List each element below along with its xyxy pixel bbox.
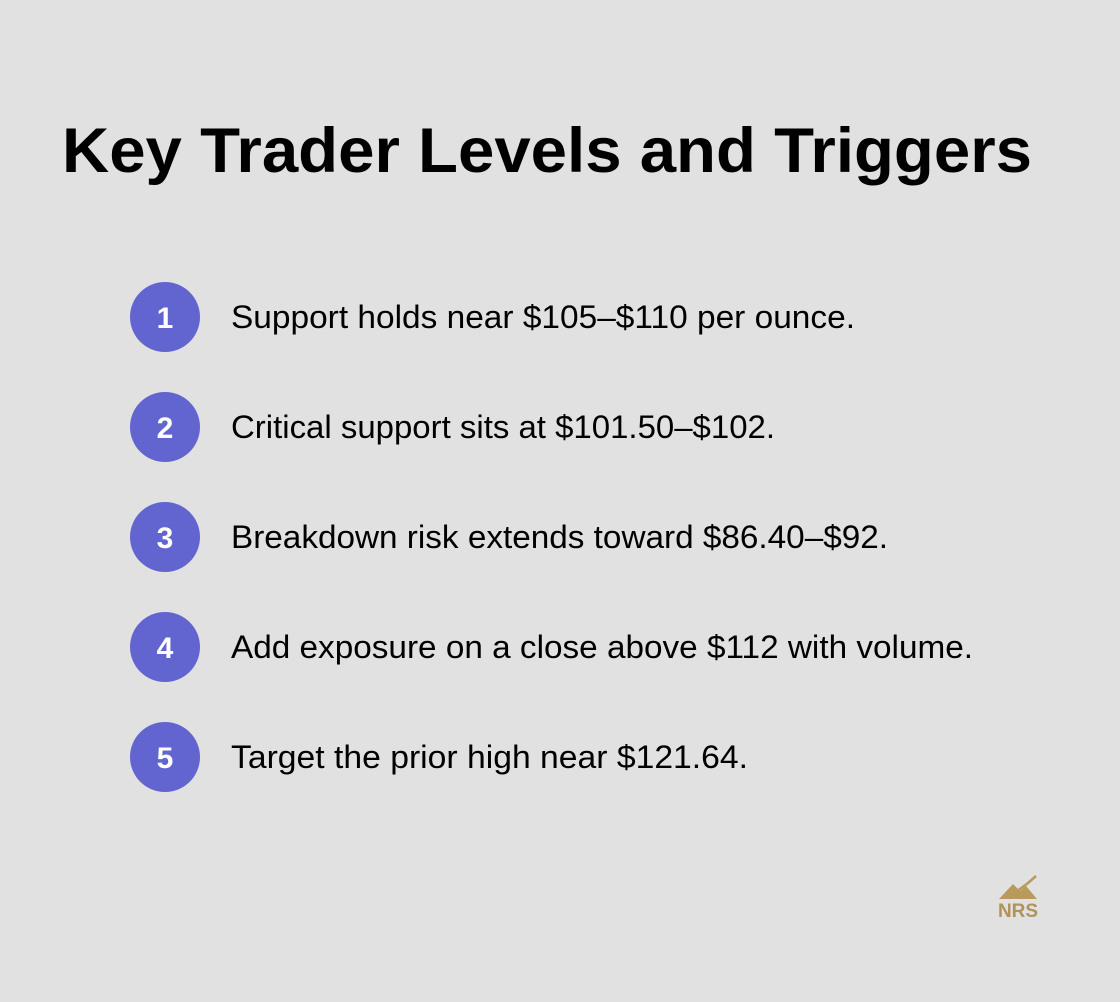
icon: number 5	[130, 722, 200, 792]
icon: number 4	[130, 612, 200, 682]
logo: NRS	[998, 876, 1038, 922]
item 3	[130, 502, 888, 572]
icon: number 5: 5	[157, 742, 173, 775]
item 4	[130, 612, 973, 682]
text 1: Support holds near $105–$110 per ounce.	[231, 299, 855, 335]
title: Key Trader Levels and Triggers	[62, 116, 1032, 186]
icon: number 4: 4	[157, 632, 174, 665]
text 2: Critical support sits at $101.50–$102.	[231, 409, 775, 445]
text 3: Breakdown risk extends toward $86.40–$92.	[231, 519, 888, 555]
icon: number 3	[130, 502, 200, 572]
logo: NRS: NRS	[998, 901, 1038, 922]
icon: number 2	[130, 392, 200, 462]
text 5: Target the prior high near $121.64.	[231, 739, 748, 775]
icon: number 1	[130, 282, 200, 352]
text 4: Add exposure on a close above $112 with volume.	[231, 629, 973, 665]
item 2	[130, 392, 775, 462]
item 1	[130, 282, 855, 352]
icon: number 1: 1	[157, 302, 173, 335]
item 5	[130, 722, 748, 792]
icon: number 3: 3	[157, 522, 173, 555]
icon: number 2: 2	[157, 412, 173, 445]
